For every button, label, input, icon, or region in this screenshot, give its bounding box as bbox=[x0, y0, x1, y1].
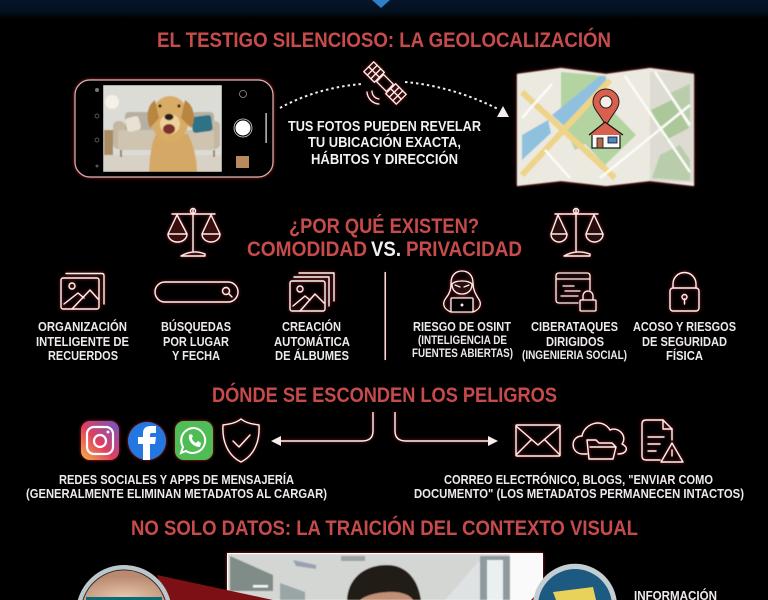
arrow: to social networks bbox=[271, 412, 373, 446]
column labels: comodidad: RECUERDOS bbox=[48, 349, 118, 363]
icon: instagram bbox=[81, 421, 119, 460]
column labels: comodidad: ORGANIZACIÓN bbox=[38, 319, 127, 334]
column labels: privacidad: CIBERATAQUES bbox=[531, 320, 618, 334]
caption: email and blogs: DOCUMENTO" (LOS METADATOS PERMANECEN INTACTOS) bbox=[414, 487, 744, 501]
right magnifier circle with sticky note bbox=[531, 564, 617, 600]
top band bbox=[0, 0, 768, 19]
geolocation text bbox=[288, 119, 481, 168]
arrow: to email and blogs bbox=[395, 412, 498, 446]
dotted arrow: satellite to map bbox=[405, 82, 509, 117]
icon: search bar bbox=[155, 282, 238, 302]
caption: email and blogs: CORREO ELECTRÓNICO, BLOGS, "ENVIAR COMO bbox=[444, 472, 713, 487]
column labels: privacidad: FÍSICA bbox=[666, 348, 703, 363]
icon: whatsapp bbox=[175, 421, 213, 460]
heading: por qué existen: PRIVACIDAD bbox=[406, 238, 522, 261]
icon: photo bbox=[61, 274, 104, 309]
geolocation text: TUS FOTOS PUEDEN REVELAR bbox=[288, 119, 481, 135]
column labels: comodidad: POR LUGAR bbox=[163, 335, 229, 349]
column labels: comodidad bbox=[36, 319, 350, 363]
icon: left scales bbox=[168, 208, 220, 256]
column labels: privacidad: DE SEGURIDAD bbox=[642, 335, 727, 349]
icon: document warning bbox=[642, 420, 683, 462]
heading: por qué existen: VS. bbox=[371, 238, 401, 261]
geolocation text: HÁBITOS Y DIRECCIÓN bbox=[311, 150, 458, 168]
heading: por qué existen: ¿POR QUÉ EXISTEN? bbox=[289, 215, 479, 238]
folded map with pin and house bbox=[517, 68, 694, 186]
icon: browser and lock bbox=[556, 273, 596, 311]
column labels: privacidad bbox=[412, 320, 736, 363]
caption: social networks: (GENERALMENTE ELIMINAN METADATOS AL CARGAR) bbox=[26, 487, 327, 501]
icon: right scales bbox=[551, 208, 603, 256]
left magnifier circle bbox=[78, 565, 170, 600]
icon: padlock bbox=[670, 272, 699, 311]
icon: house bbox=[589, 122, 623, 148]
vertical divider bbox=[384, 272, 386, 360]
icon: hacker bbox=[444, 271, 480, 312]
column labels: privacidad: (INTELIGENCIA DE bbox=[418, 335, 507, 347]
heading: contexto visual: NO SOLO DATOS: LA TRAICIÓN DEL CONTEXTO VISUAL bbox=[131, 516, 638, 540]
column labels: comodidad: BÚSQUEDAS bbox=[161, 319, 231, 334]
column labels: comodidad: Y FECHA bbox=[172, 349, 220, 363]
icon: facebook bbox=[128, 422, 166, 460]
title: geolocalización: EL TESTIGO SILENCIOSO: LA GEOLOCALIZACIÓN bbox=[157, 28, 611, 52]
caption: social networks: REDES SOCIALES Y APPS DE MENSAJERÍA bbox=[59, 472, 294, 487]
heading: por qué existen bbox=[247, 215, 522, 261]
caption: social networks bbox=[26, 472, 327, 501]
icon: shield bbox=[223, 419, 259, 462]
icon: location pin bbox=[593, 89, 619, 126]
column labels: comodidad: DE ÁLBUMES bbox=[275, 348, 349, 363]
caption: email and blogs bbox=[414, 472, 744, 501]
icon: envelope bbox=[516, 425, 560, 456]
geolocation text: TU UBICACIÓN EXACTA, bbox=[308, 133, 461, 151]
office photo bbox=[227, 553, 543, 600]
column labels: privacidad: (INGENIERIA SOCIAL) bbox=[522, 350, 627, 362]
heading: dónde se esconden: DÓNDE SE ESCONDEN LOS PELIGROS bbox=[212, 383, 557, 407]
column labels: comodidad: CREACIÓN bbox=[282, 319, 341, 334]
column labels: privacidad: RIESGO DE OSINT bbox=[413, 320, 511, 334]
column labels: comodidad: AUTOMÁTICA bbox=[274, 334, 350, 349]
icon: albums bbox=[290, 273, 334, 311]
dotted arc: phone to satellite bbox=[280, 84, 362, 108]
phone with dog photo bbox=[75, 80, 273, 177]
icon: cloud folder bbox=[573, 423, 626, 459]
column labels: comodidad: INTELIGENTE DE bbox=[36, 335, 129, 349]
magnifier beam bbox=[157, 575, 273, 600]
heading: por qué existen: COMODIDAD bbox=[247, 238, 367, 261]
icon: satellite bbox=[364, 62, 406, 104]
column labels: privacidad: ACOSO Y RIESGOS bbox=[633, 320, 736, 334]
column labels: privacidad: DIRIGIDOS bbox=[546, 335, 604, 349]
column labels: privacidad: FUENTES ABIERTAS) bbox=[412, 348, 513, 360]
